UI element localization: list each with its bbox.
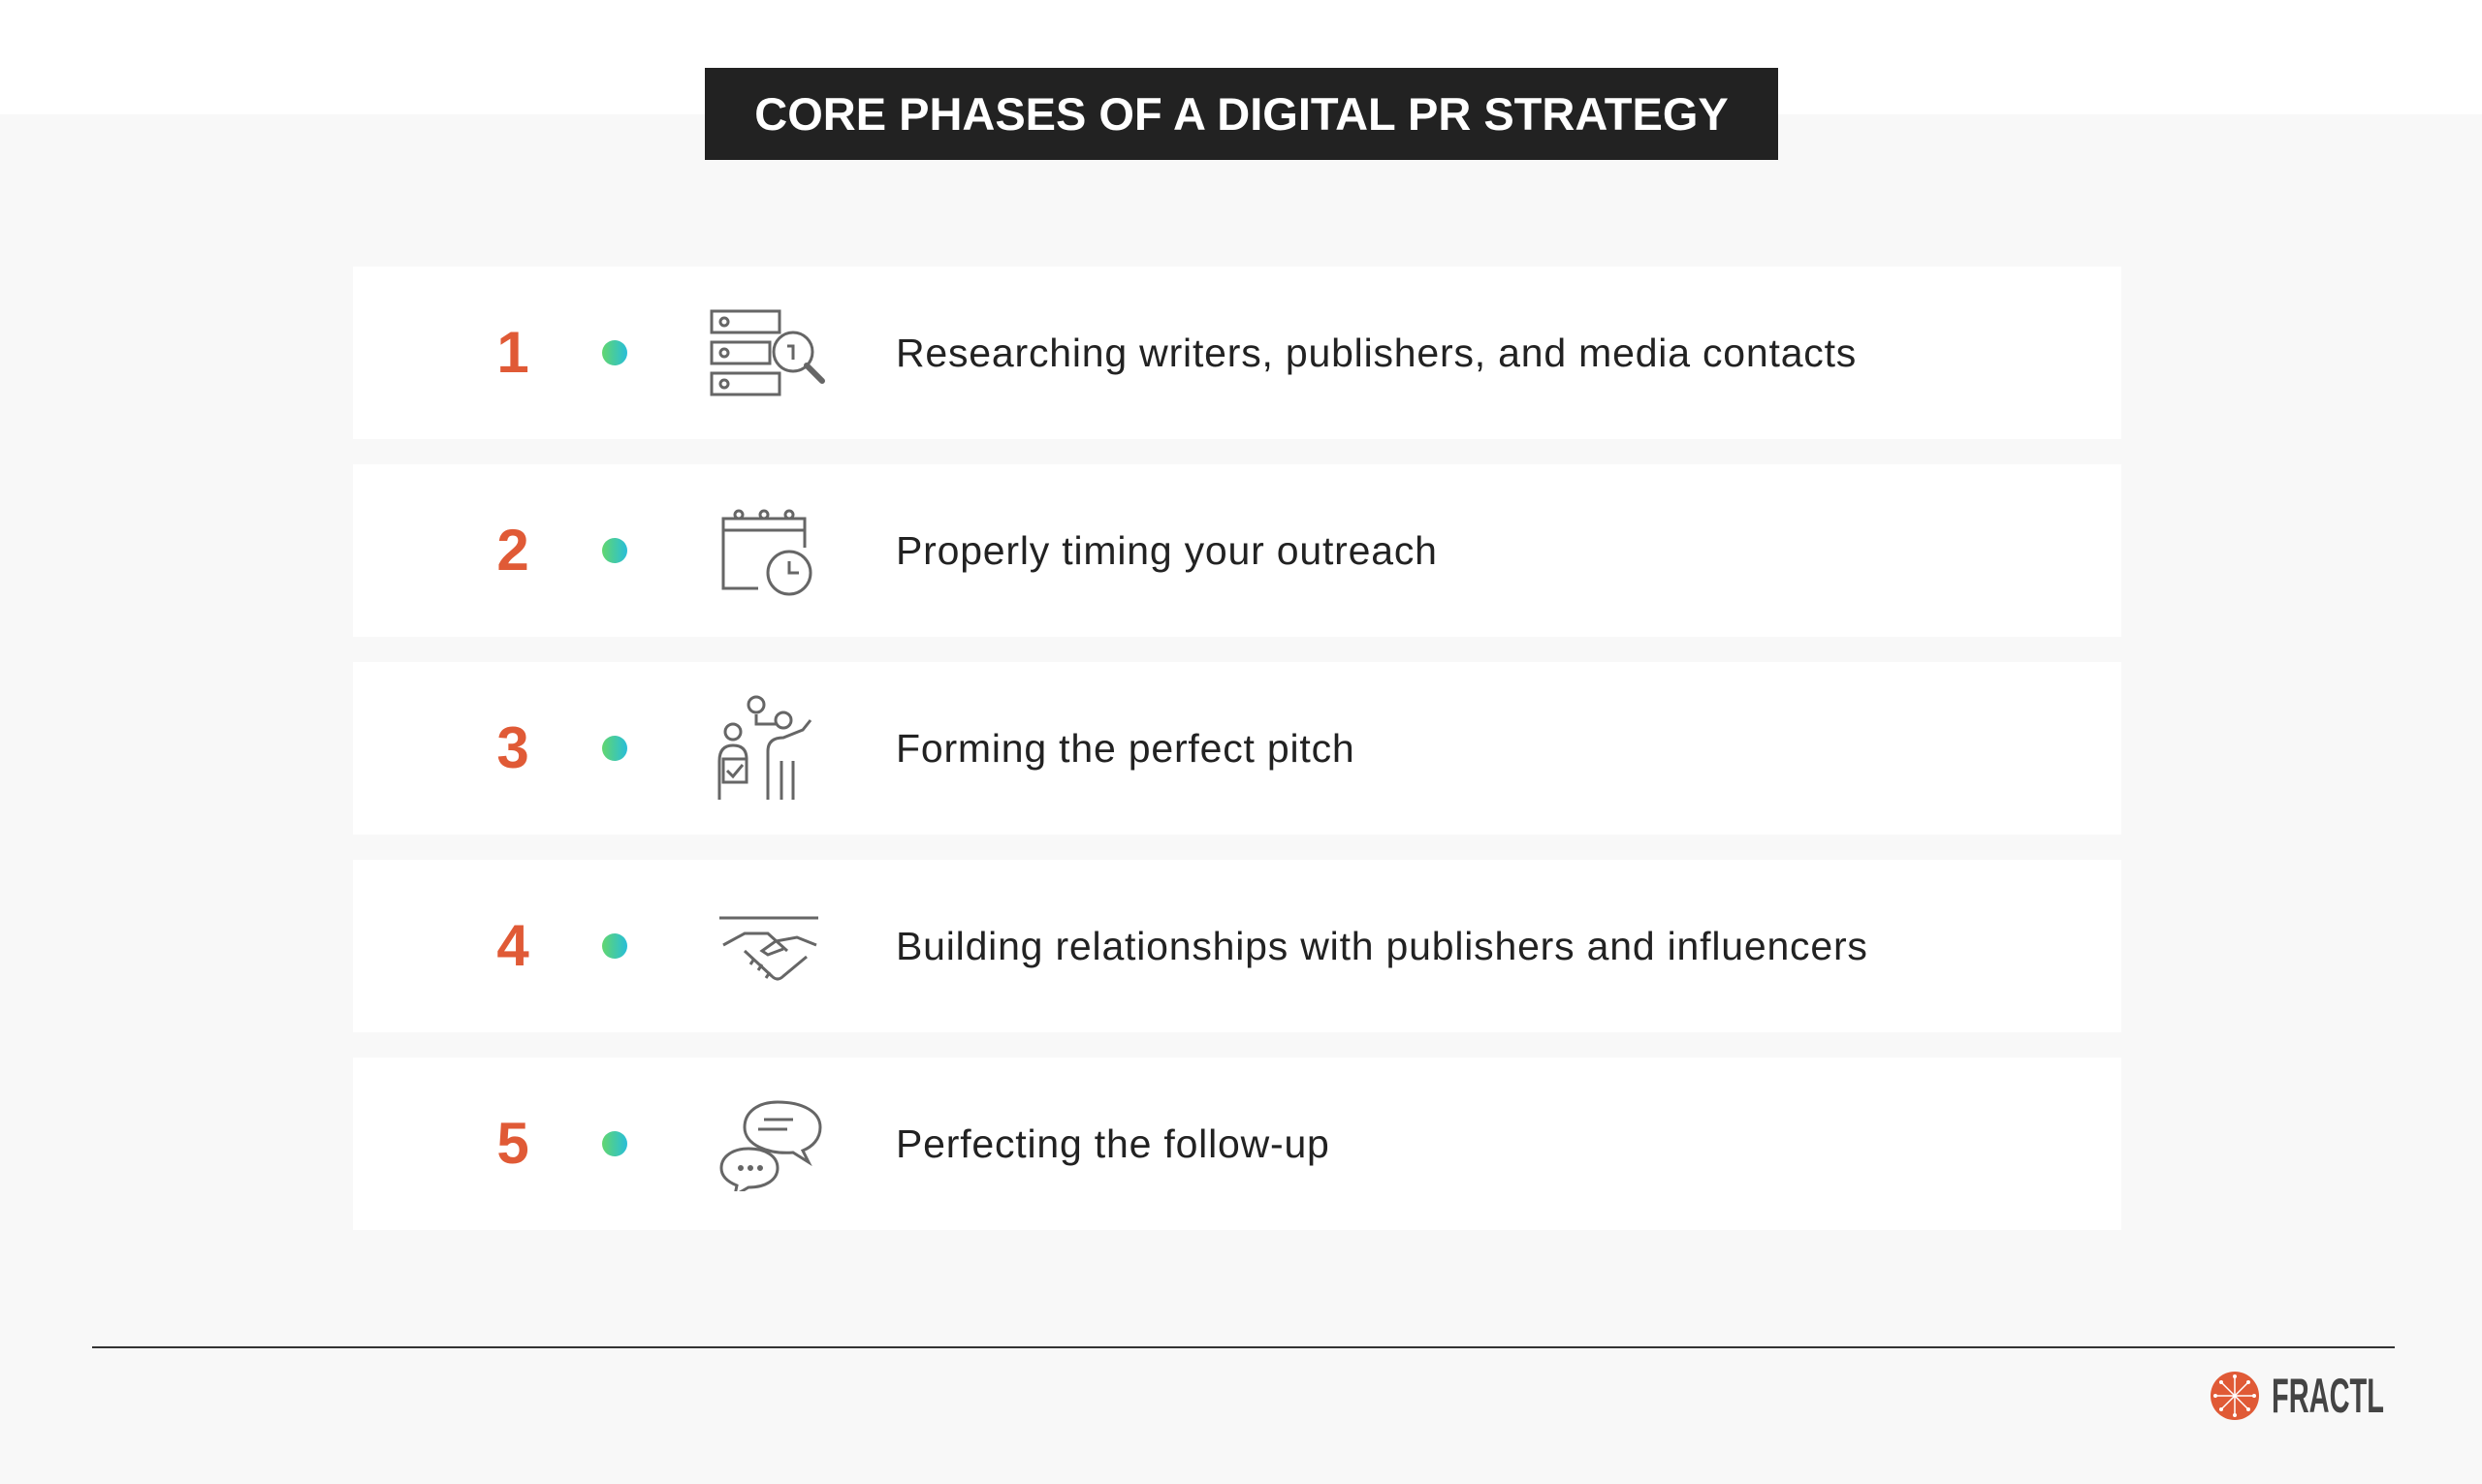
number 3: 3 <box>496 715 529 780</box>
dot <box>602 1131 627 1156</box>
text: Perfecting the follow-up <box>896 1121 1330 1166</box>
icon: handshake <box>719 917 818 981</box>
row 5 <box>353 1058 2121 1230</box>
number 2: 2 <box>496 518 529 583</box>
row 3 <box>353 662 2121 835</box>
number 1: 1 <box>496 320 529 385</box>
dot <box>602 340 627 365</box>
icon: people presenting <box>717 696 812 800</box>
dot <box>602 538 627 563</box>
title: CORE PHASES OF A DIGITAL PR STRATEGY <box>754 88 1729 140</box>
text: Building relationships with publishers and influencers <box>896 924 1868 968</box>
text: Forming the perfect pitch <box>896 726 1354 771</box>
row 1 <box>353 267 2121 439</box>
icon: chat bubbles <box>719 1101 822 1191</box>
number 5: 5 <box>496 1111 529 1176</box>
icon: calendar clock <box>721 510 812 595</box>
logo: fractl: FRACTL <box>2272 1369 2384 1423</box>
dot <box>602 933 627 959</box>
row 4 <box>353 860 2121 1032</box>
logo: fractl <box>2211 1369 2384 1423</box>
text: Researching writers, publishers, and media contacts <box>896 331 1857 375</box>
dot <box>602 736 627 761</box>
text: Properly timing your outreach <box>896 528 1438 573</box>
icon: servers with magnifier <box>710 310 825 395</box>
title <box>705 68 1778 160</box>
row 2 <box>353 464 2121 637</box>
number 4: 4 <box>496 913 529 978</box>
